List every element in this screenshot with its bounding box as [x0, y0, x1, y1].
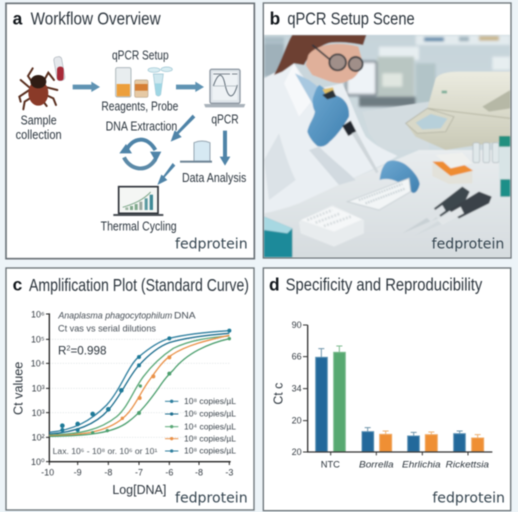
annotation — [57, 311, 196, 333]
legend: 10⁴ copies/µL — [184, 421, 236, 431]
x labels: Borrella — [359, 459, 394, 469]
heading c: c — [13, 275, 23, 295]
orange tip box — [432, 160, 474, 184]
icon: cycle arrows — [119, 140, 161, 168]
r squared: 2 — [66, 344, 70, 353]
background shelf — [264, 35, 510, 77]
y ticks: 10⁵ — [31, 335, 45, 345]
y ticks: 20 — [292, 416, 302, 426]
x labels: Ehrlichia — [402, 459, 441, 469]
arrow: sample to setup — [73, 82, 100, 92]
label: DNA extraction: DNA Extraction — [106, 120, 177, 134]
annotation: Anaplasma phagocytophilum — [57, 311, 173, 321]
label: thermal cycling: Thermal Cycling — [101, 220, 177, 234]
machine: thermal cycler — [406, 72, 510, 150]
label: reagents probe: Reagents, Probe — [101, 100, 178, 114]
r squared: R — [58, 345, 66, 358]
x labels: NTC — [321, 459, 340, 469]
y-axis title: Ct valuee — [11, 362, 26, 415]
x ticks: -9 — [74, 467, 82, 477]
panel c: amplification plot — [6, 268, 254, 510]
y ticks: 10⁰ — [31, 457, 45, 467]
annotation: DNA — [174, 311, 196, 321]
heading a: a — [13, 8, 23, 28]
icon: reagents — [116, 67, 172, 97]
legend: 10⁸ copies/µL — [184, 446, 236, 456]
x ticks: -8 — [195, 467, 203, 477]
watermark c: fedprotein — [175, 491, 248, 507]
photo: lab scene — [264, 35, 510, 257]
heading d: Specificity and Reproducibility — [286, 275, 483, 295]
legend — [165, 396, 236, 456]
line chart — [11, 309, 236, 497]
y ticks: 10⁶ — [31, 309, 45, 319]
heading d: d — [269, 275, 280, 295]
bars — [316, 352, 484, 452]
error bars — [318, 346, 481, 438]
x ticks: -3 — [225, 467, 233, 477]
y ticks — [31, 309, 45, 467]
back bench — [386, 102, 429, 110]
arrow: qPCR to analysis — [220, 131, 230, 166]
label: qPCR setup: qPCR Setup — [112, 49, 169, 63]
y ticks — [292, 320, 302, 457]
y ticks: 10³ — [32, 408, 45, 418]
label: data analysis: Data Analysis — [182, 171, 246, 185]
x labels — [321, 459, 489, 469]
heading a: Workflow Overview — [31, 9, 161, 29]
teal box — [264, 217, 292, 257]
text: sample collection: collection — [16, 128, 62, 142]
arrow: analysis to cycling — [157, 163, 175, 185]
table — [283, 150, 510, 211]
heading c: Amplification Plot (Standard Curve) — [29, 275, 249, 295]
heading b: qPCR Setup Scene — [287, 9, 415, 29]
legend: 10⁸ copies/µL — [184, 433, 236, 443]
legend: 10⁶ copies/µL — [184, 409, 236, 419]
second gloved hand — [380, 161, 420, 193]
two pipettes on table — [408, 186, 492, 230]
icon: laptop with wave — [204, 69, 245, 107]
x ticks: -8 — [104, 467, 112, 477]
icon: tick — [19, 68, 57, 109]
range note: Lax. 10⁶ - 10⁸ or. 10⁶ or 10¹ — [53, 446, 158, 456]
scientist face — [306, 44, 363, 83]
panel d: specificity and reproducibility — [263, 268, 511, 511]
tubes and teal bottles — [473, 136, 510, 197]
x labels: Rickettsia — [446, 459, 489, 469]
x ticks: -6 — [165, 467, 173, 477]
arrow: qPCR to extraction — [171, 115, 195, 142]
watermark d: fedprotein — [432, 491, 505, 507]
annotation: Ct vas vs serial dilutions — [58, 323, 157, 333]
y ticks: 10⁴ — [31, 359, 45, 369]
y-axis title: Ct c — [270, 382, 285, 405]
y ticks: 66 — [292, 352, 302, 362]
curves — [49, 331, 229, 436]
scientist hair — [274, 35, 366, 75]
x-axis title: Log[DNA] — [112, 482, 166, 497]
plate on table — [347, 178, 411, 210]
glasses — [312, 45, 363, 71]
panel b: qPCR setup scene — [263, 3, 511, 258]
r squared: =0.998 — [70, 345, 106, 358]
x ticks: -10 — [41, 467, 54, 477]
heading b: b — [270, 8, 280, 28]
arrow: setup to qPCR — [176, 82, 204, 92]
data points — [60, 329, 231, 432]
y ticks: 90 — [292, 320, 302, 330]
y ticks: 10³ — [32, 384, 45, 394]
x ticks: -7 — [135, 467, 143, 477]
icon: blood tube — [53, 56, 65, 81]
y ticks: 20 — [292, 447, 302, 457]
watermark a: fedprotein — [175, 237, 248, 253]
background monitor and machine — [346, 57, 436, 107]
axes — [49, 313, 231, 462]
label: qPCR: qPCR — [211, 112, 239, 126]
y ticks: 10² — [32, 433, 45, 443]
x ticks — [41, 467, 233, 477]
icon: laptop with bars — [113, 187, 163, 216]
bar chart — [270, 320, 492, 469]
y ticks: 34 — [292, 384, 302, 394]
scientist coat — [264, 63, 397, 213]
text: sample collection: Sample — [21, 113, 57, 127]
white tip box — [299, 205, 364, 247]
legend: 10⁸ copies/µL — [184, 396, 236, 406]
axes — [308, 325, 492, 452]
text: sample collection — [16, 113, 62, 142]
icon: sample rack — [180, 141, 212, 163]
panel a: workflow overview — [6, 3, 254, 259]
gloved hand and pipette — [307, 85, 378, 173]
watermark b: fedprotein — [432, 237, 504, 253]
